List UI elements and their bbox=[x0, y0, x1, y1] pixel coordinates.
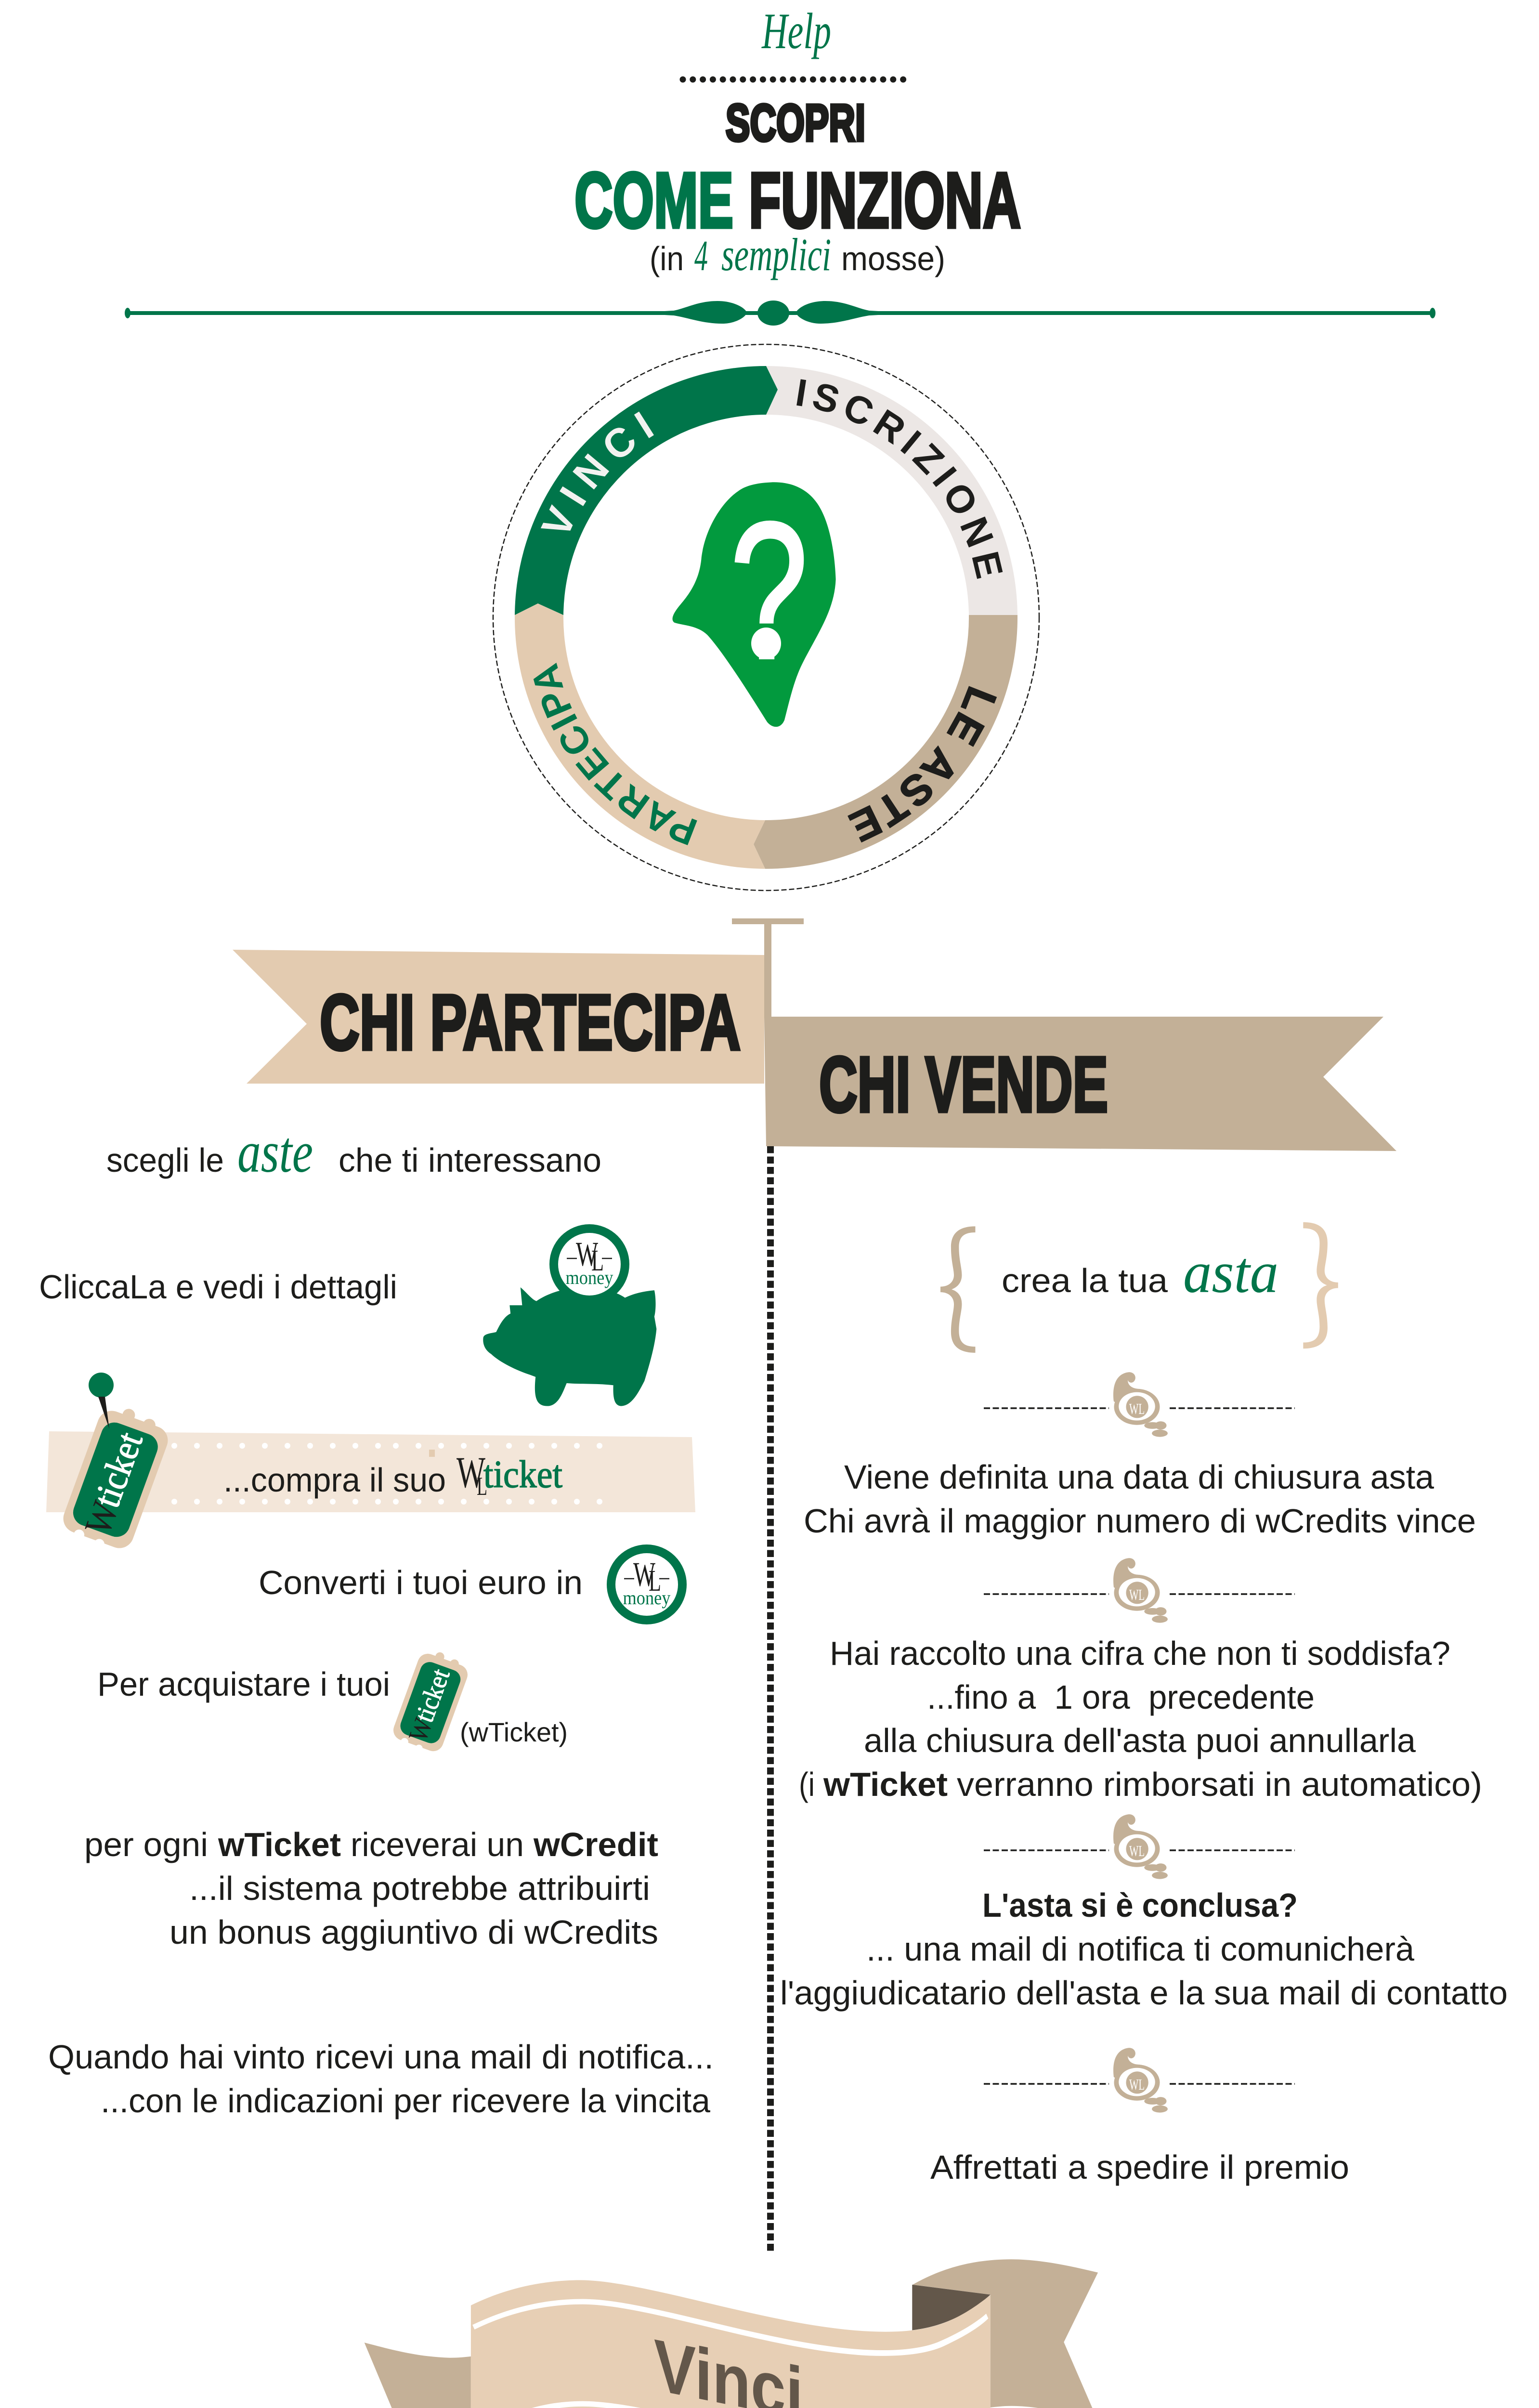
band: compra bbox=[46, 1431, 695, 1512]
text: scegli le aste: che ti interessano bbox=[339, 1141, 601, 1179]
panel: chi vende bbox=[780, 1222, 1508, 2186]
ornament 4 bbox=[984, 2048, 1295, 2113]
icon: piggy bank with coin: money bbox=[565, 1267, 613, 1288]
segment: le aste bbox=[754, 615, 1017, 869]
icon: piggy bank with coin bbox=[483, 1224, 656, 1406]
icon: piggy bank with coin: W bbox=[576, 1235, 598, 1273]
icon: large ticket with pin: W bbox=[76, 1495, 127, 1540]
text: scegli le aste: aste bbox=[237, 1120, 313, 1185]
heading: come funziona: FUNZIONA bbox=[749, 156, 1021, 244]
label: partecipa: PARTECIPA bbox=[534, 663, 697, 845]
icon: question pin bbox=[673, 482, 836, 727]
banner: vinci bbox=[365, 2259, 1098, 2408]
subtitle bbox=[650, 229, 945, 280]
text: cliccala: CliccaLa e vedi i dettagli bbox=[39, 1268, 397, 1306]
subtitle: mosse) bbox=[841, 240, 945, 277]
text: credit rules: wTicket bbox=[218, 1826, 341, 1863]
heading: come funziona: COME bbox=[574, 156, 733, 244]
icon: wl money coin: money bbox=[623, 1587, 670, 1609]
text: data di chiusura bbox=[804, 1458, 1476, 1540]
icon: piggy bank with coin: L bbox=[591, 1244, 604, 1277]
ornament 2 bbox=[984, 1558, 1295, 1623]
text: credit rules: per ogni bbox=[84, 1826, 208, 1863]
band: compra: W bbox=[456, 1448, 485, 1497]
text: winner notice bbox=[48, 2038, 714, 2120]
segment: iscrizione bbox=[766, 366, 1017, 615]
icon: wl money coin: W bbox=[633, 1555, 655, 1594]
text: scegli le aste: scegli le bbox=[106, 1141, 224, 1179]
callout: crea la tua asta: asta bbox=[1183, 1240, 1278, 1305]
text: asta conclusa bbox=[780, 1886, 1508, 2012]
ornament 3 bbox=[984, 1814, 1295, 1879]
text: annullare asta: wTicket bbox=[823, 1766, 948, 1803]
icon: small ticket bbox=[389, 1646, 472, 1759]
text: data di chiusura: Viene definita una data di chiusura asta bbox=[844, 1458, 1434, 1496]
text: wticket note: (wTicket) bbox=[460, 1717, 568, 1747]
panel: chi partecipa bbox=[39, 1120, 714, 2120]
help script word: Help bbox=[761, 3, 831, 59]
text: credit rules: un bonus aggiuntivo di wCredits bbox=[170, 1913, 658, 1951]
text: annullare asta: ...fino a 1 ora precedente bbox=[927, 1678, 1315, 1716]
label: vinci: VINCI bbox=[540, 411, 654, 531]
band: compra: ticket bbox=[483, 1453, 562, 1496]
icon: wl money coin: L bbox=[649, 1565, 661, 1597]
text: asta conclusa: L'asta si è conclusa? bbox=[982, 1886, 1298, 1924]
text: converti: Converti i tuoi euro in bbox=[259, 1564, 583, 1601]
band: compra: ...compra il suo bbox=[223, 1461, 446, 1499]
heading: scopri: SCOPRI bbox=[726, 93, 865, 152]
text: credit rules: ...il sistema potrebbe attribuirti bbox=[189, 1870, 650, 1907]
text: credit rules: wCredit bbox=[533, 1826, 658, 1863]
flag: chi vende bbox=[764, 1017, 1396, 1151]
callout: crea la tua asta: crea la tua bbox=[1002, 1262, 1168, 1299]
text: credit rules: riceverai un bbox=[351, 1826, 524, 1863]
icon: question pin: ? bbox=[730, 482, 808, 699]
flag: chi partecipa bbox=[233, 950, 764, 1084]
icon: large ticket with pin: ticket bbox=[85, 1426, 151, 1513]
ornament 3: WL bbox=[1129, 1842, 1145, 1859]
heading: come funziona bbox=[574, 156, 1021, 244]
text: annullare asta: Hai raccolto una cifra che non ti soddisfa? bbox=[830, 1635, 1450, 1672]
text: scegli le aste bbox=[106, 1120, 601, 1185]
text: credit rules bbox=[84, 1826, 658, 1951]
label: iscrizione: ISCRIZIONE bbox=[796, 379, 1003, 579]
text: winner notice: Quando hai vinto ricevi una mail di notifica... bbox=[48, 2038, 714, 2076]
flag: chi vende: CHI VENDE bbox=[819, 1040, 1108, 1128]
text: winner notice: ...con le indicazioni per ricevere la vincita bbox=[101, 2082, 710, 2120]
icon: large ticket with pin bbox=[57, 1373, 174, 1559]
icon: wl money coin bbox=[607, 1544, 687, 1624]
band: compra: L bbox=[477, 1472, 487, 1501]
icon: small ticket: ticket bbox=[409, 1665, 456, 1726]
circular diagram bbox=[492, 344, 1040, 891]
segment: partecipa bbox=[515, 603, 765, 869]
flag pole bbox=[732, 918, 804, 1018]
text: annullare asta: alla chiusura dell'asta puoi annullarla bbox=[864, 1722, 1416, 1759]
ornament 2: WL bbox=[1129, 1586, 1145, 1603]
icon: small ticket: W bbox=[403, 1714, 438, 1745]
ornamental divider bbox=[125, 301, 1435, 326]
text: asta conclusa: l'aggiudicatario dell'asta e la sua mail di contatto bbox=[780, 1974, 1508, 2012]
text: data di chiusura: Chi avrà il maggior numero di wCredits vince bbox=[804, 1502, 1476, 1540]
text: annullare asta: verranno rimborsati in automatico) bbox=[957, 1766, 1482, 1803]
ornament 4: WL bbox=[1129, 2076, 1145, 2093]
subtitle: 4 bbox=[694, 232, 708, 280]
text: annullare asta bbox=[799, 1635, 1482, 1803]
text: annullare asta: (i bbox=[799, 1766, 815, 1803]
flag: chi partecipa: CHI PARTECIPA bbox=[320, 978, 741, 1066]
text: asta conclusa: ... una mail di notifica ti comunicherà bbox=[866, 1930, 1414, 1968]
text: affrettati: Affrettati a spedire il premio bbox=[930, 2148, 1349, 2186]
segment: vinci bbox=[515, 366, 778, 615]
ornament 1: WL bbox=[1129, 1400, 1145, 1417]
text: per acquistare: Per acquistare i tuoi bbox=[97, 1665, 390, 1703]
header bbox=[574, 3, 1021, 280]
callout: crea la tua asta bbox=[940, 1222, 1338, 1353]
subtitle: (in bbox=[650, 240, 684, 277]
ornament 1 bbox=[984, 1372, 1295, 1437]
label: le aste: LE ASTE bbox=[848, 686, 997, 843]
subtitle: semplici bbox=[721, 229, 831, 280]
